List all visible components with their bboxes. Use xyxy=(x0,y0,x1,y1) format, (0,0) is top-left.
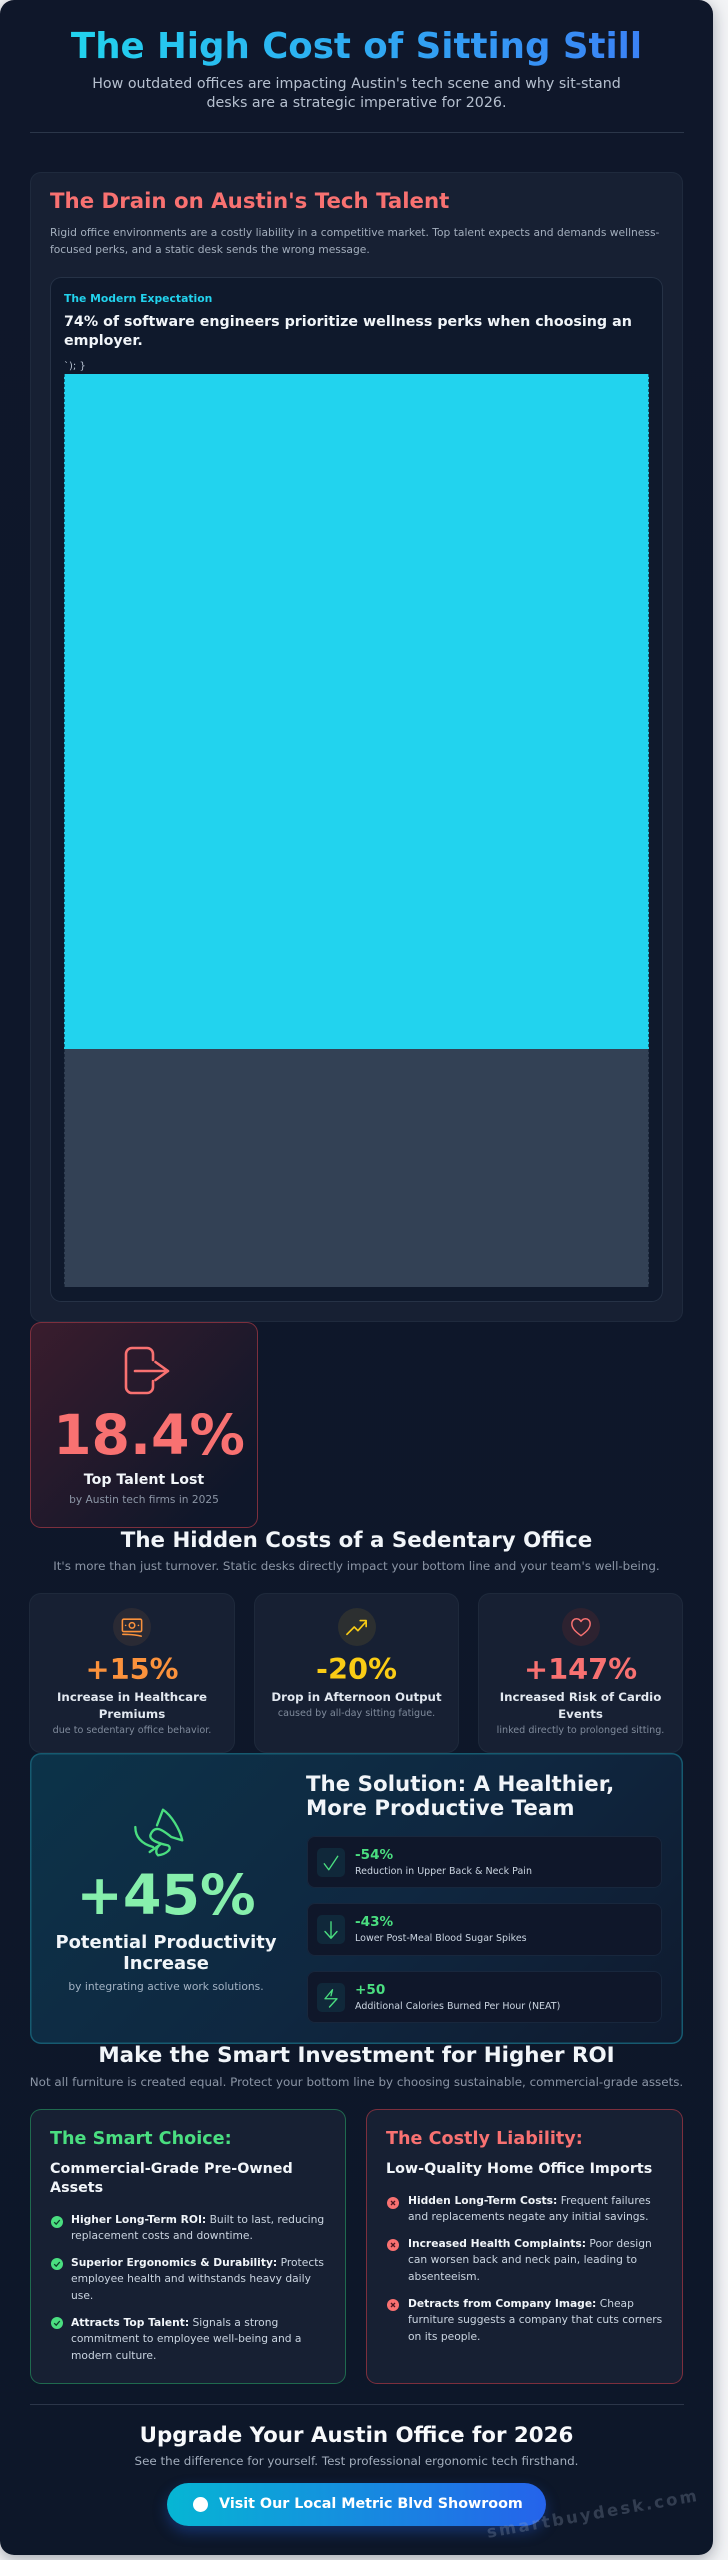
icon: arrow down xyxy=(317,1915,345,1944)
stray code text: `); } xyxy=(64,361,86,372)
cost card: cardio events xyxy=(478,1593,683,1753)
stat note: healthcare: due to sedentary office behavior. xyxy=(53,1725,211,1736)
heading: solution xyxy=(306,1772,614,1821)
subheading: commercial grade: Commercial-Grade Pre-Owned xyxy=(50,2160,293,2176)
panel: the costly liability xyxy=(366,2109,683,2384)
bullet: top talent: modern culture. xyxy=(71,2349,156,2362)
paragraph: drain intro: focused perks, and a static desk sends the wrong message. xyxy=(50,242,370,256)
label: modern expectation: The Modern Expectation xyxy=(64,292,212,305)
stat label: healthcare xyxy=(57,1690,207,1720)
subtitle: How outdated offices are impacting Austin's tech scene and why sit-stand xyxy=(92,76,621,92)
icon: check badge 2 xyxy=(51,2258,63,2270)
panel: the modern expectation xyxy=(50,277,663,1302)
bullet: top talent: Attracts Top Talent: Signals a strong xyxy=(71,2316,278,2328)
bullet: higher ROI: replacement costs and downtime. xyxy=(71,2229,253,2242)
icon: check badge 1 xyxy=(51,2216,63,2228)
subheading: smart investment: Not all furniture is created equal. Protect your bottom line by choosing sustainable, commercial-grade assets. xyxy=(30,2075,683,2089)
watermark: smartbuydesk.com xyxy=(485,2486,701,2542)
icon: heart xyxy=(562,1608,600,1646)
stat note: cardio: linked directly to prolonged sitting. xyxy=(497,1725,664,1736)
description: calories: Additional Calories Burned Per Hour (NEAT) xyxy=(355,2001,560,2012)
benefit row: blood sugar xyxy=(307,1903,662,1956)
heading: smart choice: The Smart Choice: xyxy=(50,2129,232,2149)
bullet: health complaints: Increased Health Complaints: Poor design xyxy=(408,2236,652,2250)
stat label: productivity: Increase xyxy=(123,1952,209,1974)
icon: x badge 3 xyxy=(387,2299,399,2311)
bar segment: 74 percent xyxy=(64,374,649,1049)
bullet: company image: furniture suggests a company that cuts corners xyxy=(408,2313,662,2326)
bullet: hidden costs xyxy=(408,2194,651,2223)
stat value: 18.4%: 18.4% xyxy=(53,1404,245,1468)
bullet: ergonomics: use. xyxy=(71,2289,93,2302)
bullet: ergonomics xyxy=(71,2256,324,2302)
panel: the smart choice xyxy=(30,2109,346,2384)
stat note: by Austin tech firms in 2025 xyxy=(69,1494,219,1506)
subtitle: desks are a strategic imperative for 2026. xyxy=(206,94,507,110)
stat card: top talent lost xyxy=(30,1322,258,1528)
stat label: healthcare: Increase in Healthcare xyxy=(57,1690,207,1704)
icon: x badge 1 xyxy=(387,2197,399,2209)
heading: drain: The Drain on Austin's Tech Talent xyxy=(50,189,449,214)
title: The High Cost of Sitting Still xyxy=(71,26,642,67)
bullet: top talent: commitment to employee well-being and a xyxy=(71,2332,301,2345)
bullet: ergonomics: employee health and withstands heavy daily xyxy=(71,2272,311,2285)
value: +50: +50 xyxy=(355,1982,385,1998)
stat label: output: Drop in Afternoon Output xyxy=(271,1690,442,1704)
stat label: Top Talent Lost xyxy=(84,1472,204,1488)
heading: solution: More Productive Team xyxy=(306,1796,574,1821)
stat label: productivity xyxy=(55,1932,276,1974)
subheading: imports: Low-Quality Home Office Imports xyxy=(386,2160,652,2176)
description: back pain: Reduction in Upper Back & Neck Pain xyxy=(355,1866,532,1877)
subheading: commercial grade: Assets xyxy=(50,2180,103,2196)
icon: white dot xyxy=(192,2497,208,2512)
button: visit showroom xyxy=(167,2483,546,2526)
subtitle xyxy=(92,76,621,110)
subheading: hidden costs: It's more than just turnover. Static desks directly impact your bottom line and your team's well-being. xyxy=(53,1559,660,1573)
icon: x badge 2 xyxy=(387,2239,399,2251)
bullet: hidden costs: Hidden Long-Term Costs: Frequent failures xyxy=(408,2194,651,2206)
stat sentence: 74 percent xyxy=(64,314,632,348)
icon: leaf xyxy=(134,1808,184,1856)
stat label: cardio: Events xyxy=(558,1706,603,1720)
cost card: healthcare premiums xyxy=(29,1593,235,1753)
stat label: healthcare: Premiums xyxy=(99,1706,165,1720)
stat note: output: caused by all-day sitting fatigue. xyxy=(278,1708,435,1719)
icon: trend line xyxy=(338,1608,376,1646)
paragraph: drain intro: Rigid office environments are a costly liability in a competitive market. Top talent expects and demands wellness- xyxy=(50,226,659,238)
cost card: afternoon output xyxy=(254,1593,459,1753)
call to action heading: Upgrade Your Austin Office for 2026 xyxy=(140,2423,573,2448)
bullet: company image: on its people. xyxy=(408,2330,480,2343)
stat value: +147%: +147% xyxy=(524,1652,637,1686)
stat sentence: 74 percent: 74% of software engineers prioritize wellness perks when choosing an xyxy=(64,314,632,330)
stat sentence: 74 percent: employer. xyxy=(64,332,143,348)
bullet: company image xyxy=(408,2296,662,2343)
stat value: +15%: +15% xyxy=(85,1652,179,1686)
bullet: health complaints: can worsen back and neck pain, leading to xyxy=(408,2253,637,2266)
subheading: commercial grade xyxy=(50,2160,293,2196)
benefit row: back pain xyxy=(307,1836,662,1888)
bullet: higher ROI xyxy=(71,2212,324,2242)
icon: exit door xyxy=(124,1346,170,1394)
stat value: +45%: +45% xyxy=(76,1863,256,1928)
bullet: health complaints xyxy=(408,2236,652,2283)
icon: check badge 3 xyxy=(51,2317,63,2329)
heading: smart investment: Make the Smart Investment for Higher ROI xyxy=(98,2043,615,2068)
chart: 74 percent stacked bar xyxy=(64,374,649,1287)
heading: solution: The Solution: A Healthier, xyxy=(306,1772,614,1797)
paragraph: drain intro xyxy=(50,226,659,256)
benefit row: calories xyxy=(307,1971,662,2023)
call to action text: See the difference for yourself. Test professional ergonomic tech firsthand. xyxy=(135,2454,578,2468)
stat note: productivity: by integrating active work solutions. xyxy=(68,1980,264,1993)
stat label: cardio: Increased Risk of Cardio xyxy=(500,1690,661,1704)
icon: bolt xyxy=(317,1983,345,2012)
bullet: health complaints: absenteeism. xyxy=(408,2270,480,2283)
heading: hidden costs: The Hidden Costs of a Sedentary Office xyxy=(121,1528,592,1553)
stat label: cardio xyxy=(500,1690,661,1720)
icon: banknotes xyxy=(113,1608,151,1646)
bullet: hidden costs: and replacements negate any initial savings. xyxy=(408,2210,649,2223)
heading: costly liability: The Costly Liability: xyxy=(386,2129,583,2149)
bullet: company image: Detracts from Company Image: Cheap xyxy=(408,2296,634,2310)
bullet: higher ROI: Higher Long-Term ROI: Built to last, reducing xyxy=(71,2212,324,2226)
bullet: top talent xyxy=(71,2316,301,2362)
value: -54%: -54% xyxy=(355,1847,393,1863)
icon: check xyxy=(317,1848,345,1877)
description: blood sugar: Lower Post-Meal Blood Sugar Spikes xyxy=(355,1933,527,1944)
value: -43%: -43% xyxy=(355,1914,393,1930)
bullet: ergonomics: Superior Ergonomics & Durability: Protects xyxy=(71,2256,324,2268)
panel: the drain on Austin's tech talent xyxy=(30,172,683,1322)
button label: Visit Our Local Metric Blvd Showroom xyxy=(219,2496,523,2512)
panel: the solution xyxy=(30,1753,683,2044)
stat value: -20%: -20% xyxy=(316,1652,397,1686)
stat label: productivity: Potential Productivity xyxy=(55,1932,276,1952)
